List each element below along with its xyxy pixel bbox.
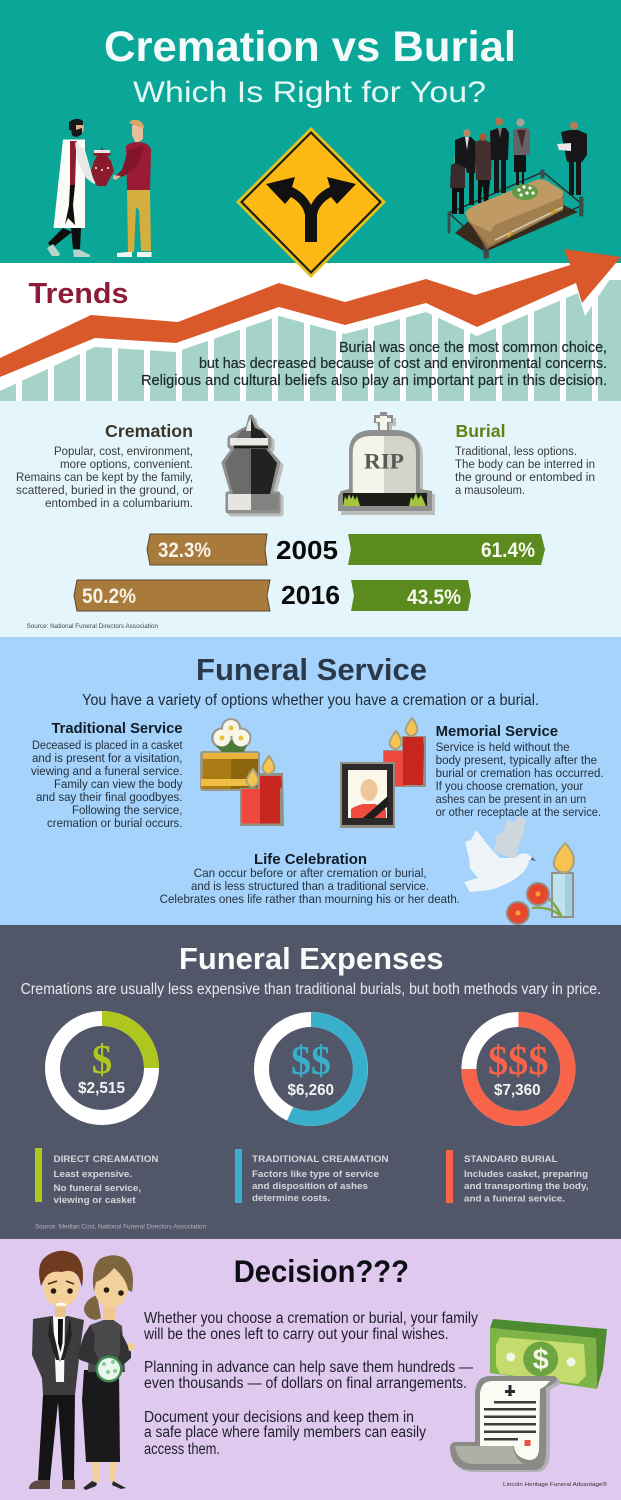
legend: direct cremation: Least expensive. [54,1169,132,1180]
illustration: grieving couple [29,1251,135,1490]
donut: direct cremation [52,1018,152,1118]
text: memorial service [436,724,604,819]
legend: standard burial [446,1150,588,1204]
text: cremation [16,421,193,510]
sub-element: platform [455,205,578,252]
text: memorial service: burial or cremation has occurred. [436,766,604,780]
donut: standard burial: $7,360 [494,1082,541,1099]
text: decision body: will be the ones left to carry out your final wishes. [143,1326,449,1343]
text: decision body [143,1310,478,1458]
text: traditional service: viewing and a funeral service. [31,764,182,778]
bar row: 2016: 43.5% [407,586,461,609]
sub-element: urn [91,147,114,186]
text: burial: The body can be interred in [455,457,595,471]
panel: header [0,0,621,263]
sub-element: casket [465,179,563,249]
icon: dove, candle and flowers [464,816,574,924]
text: memorial service: ashes can be present in an urn [436,792,586,806]
text: cremation: Popular, cost, environment, [54,444,193,458]
legend: traditional cremation: determine costs. [252,1193,330,1204]
text: decision body: Planning in advance can help save them hundreds — [144,1359,473,1376]
donut: traditional cremation: $$ [291,1037,331,1083]
icon: tombstone: RIP [364,448,404,473]
text: traditional service: Family can view the body [54,777,183,791]
legend: standard burial: STANDARD BURIAL [464,1154,558,1165]
text: trends summary [141,340,607,389]
donut: direct cremation: $2,515 [78,1080,125,1097]
text: decision body: a safe place where family members can easily [144,1424,426,1441]
legend: standard burial: and transporting the body, [464,1181,588,1192]
legend: traditional cremation: Factors like type of service [252,1169,379,1180]
icon: urn [224,417,281,514]
text: life celebration: Life Celebration [254,852,367,868]
bar row: 2016: 2016 [281,580,340,610]
bar row: 2005: 32.3% [158,539,211,562]
text: cremation: Remains can be kept by the family, [16,470,193,484]
text: trends summary: Burial was once the most common choice, [339,340,607,356]
sub-element: casket flowers [512,184,538,200]
legend: traditional cremation: TRADITIONAL CREAMATION [252,1154,389,1165]
sub-element: candle [551,843,574,918]
text: traditional service: and say their final goodbyes. [36,790,182,804]
text: intro: You have a variety of options whether you have a cremation or a burial. [82,692,539,709]
legend: direct cremation [35,1148,159,1206]
bar row: 2005 [147,534,545,565]
text: life celebration: and is less structured than a traditional service. [191,879,429,893]
text: memorial service: body present, typically after the [436,753,597,767]
text: traditional service: Traditional Service [52,721,182,737]
legend: standard burial: and a funeral service. [464,1194,565,1204]
donut: standard burial: $$$ [488,1037,548,1083]
donut: traditional cremation [262,1020,360,1118]
icon: memorial portrait frame [340,762,395,828]
bar row: 2016: 50.2% [82,585,136,608]
source note: Source: Median Cost, National Funeral Directors Association [35,1224,206,1230]
heading: trends: Trends [28,278,128,310]
sub-element: woman [77,1255,135,1490]
text: cremation: scattered, buried in the ground, or [16,483,193,497]
sub-element: mourners [450,118,587,214]
donut: traditional cremation: $6,260 [288,1082,334,1099]
illustration: mourners around casket [448,118,587,258]
text: traditional service: cremation or burial occurs. [47,816,182,830]
icon: road sign fork [236,127,386,278]
illustration: doctor hands urn to man [47,119,152,257]
text: life celebration: Can occur before or after cremation or burial, [194,866,427,880]
text: burial: Traditional, less options. [455,444,577,458]
text: life celebration [160,852,460,906]
text: traditional service: Following the service, [72,803,182,817]
bar row: 2016 [74,580,471,611]
legend: standard burial: Includes casket, preparing [464,1169,588,1180]
credit: Lincoln Heritage Funeral Advantage® [503,1481,608,1488]
sub-element: man [29,1251,84,1489]
text: cremation: entombed in a columbarium. [45,496,193,510]
text: decision body: Whether you choose a cremation or burial, your family [144,1310,478,1327]
donut: direct cremation: $ [92,1036,112,1082]
icon: money stack: $ [533,1344,549,1376]
text: life celebration: Celebrates ones life rather than mourning his or her death. [160,892,460,906]
icon: candles, right [383,718,426,787]
bar chart backdrop [0,280,621,401]
text: burial: Burial [456,421,506,441]
text: traditional service: Deceased is placed in a casket [32,738,183,752]
panel: cremation vs burial statistics [0,401,621,637]
text: memorial service: Service is held without the [436,740,570,754]
text: trends summary: Religious and cultural beliefs also play an important part in this decision. [141,373,607,389]
text: burial [455,421,595,497]
text: trends summary: but has decreased because of cost and environmental concerns. [199,356,607,372]
heading: funeral expenses: Funeral Expenses [179,941,444,976]
text: cremation: more options, convenient. [60,457,193,471]
icon: scroll document [450,1376,560,1472]
icon: flowers on casket box [200,718,260,791]
text: burial: the ground or entombed in [455,470,595,484]
icon: money stack [490,1319,607,1389]
donut: standard burial [469,1020,568,1118]
sub-element: customer [113,120,152,257]
text: traditional service: and is present for a visitation, [32,751,182,765]
legend: direct cremation: DIRECT CREAMATION [54,1154,159,1165]
legend: direct cremation: viewing or casket [54,1195,136,1206]
text: decision body: Document your decisions and keep them in [144,1409,414,1426]
title: Cremation vs Burial [104,23,516,71]
panel: funeral expenses [0,925,621,1239]
legend: traditional cremation [235,1149,389,1204]
text: decision body: even thousands — of dollars on final arrangements. [144,1375,467,1392]
bar row: 2005: 2005 [276,535,338,565]
text: decision body: access them. [144,1441,220,1458]
icon: tombstone [338,412,435,515]
text: cremation: Cremation [105,421,193,441]
arrow: rising trend [0,249,621,377]
text: memorial service: or other receptacle at the service. [436,805,601,819]
text: memorial service: Memorial Service [436,724,558,740]
source note: Source: National Funeral Directors Association [26,624,158,630]
bar row: 2005: 61.4% [481,539,535,562]
text: memorial service: If you choose cremation, your [436,779,583,793]
icon: candles, left [240,756,284,826]
subtitle: Which Is Right for You? [133,76,486,109]
legend: direct cremation: No funeral service, [54,1183,141,1194]
panel: funeral service [0,637,621,925]
text: traditional service [31,721,183,830]
heading: decision: Decision??? [234,1253,409,1289]
panel: trends [0,249,621,401]
heading: funeral service: Funeral Service [196,652,427,687]
panel: decision [0,1239,621,1500]
sub-element: bouquet [96,1356,122,1382]
legend: traditional cremation: and disposition of ashes [252,1181,368,1192]
text: burial: a mausoleum. [455,483,525,497]
